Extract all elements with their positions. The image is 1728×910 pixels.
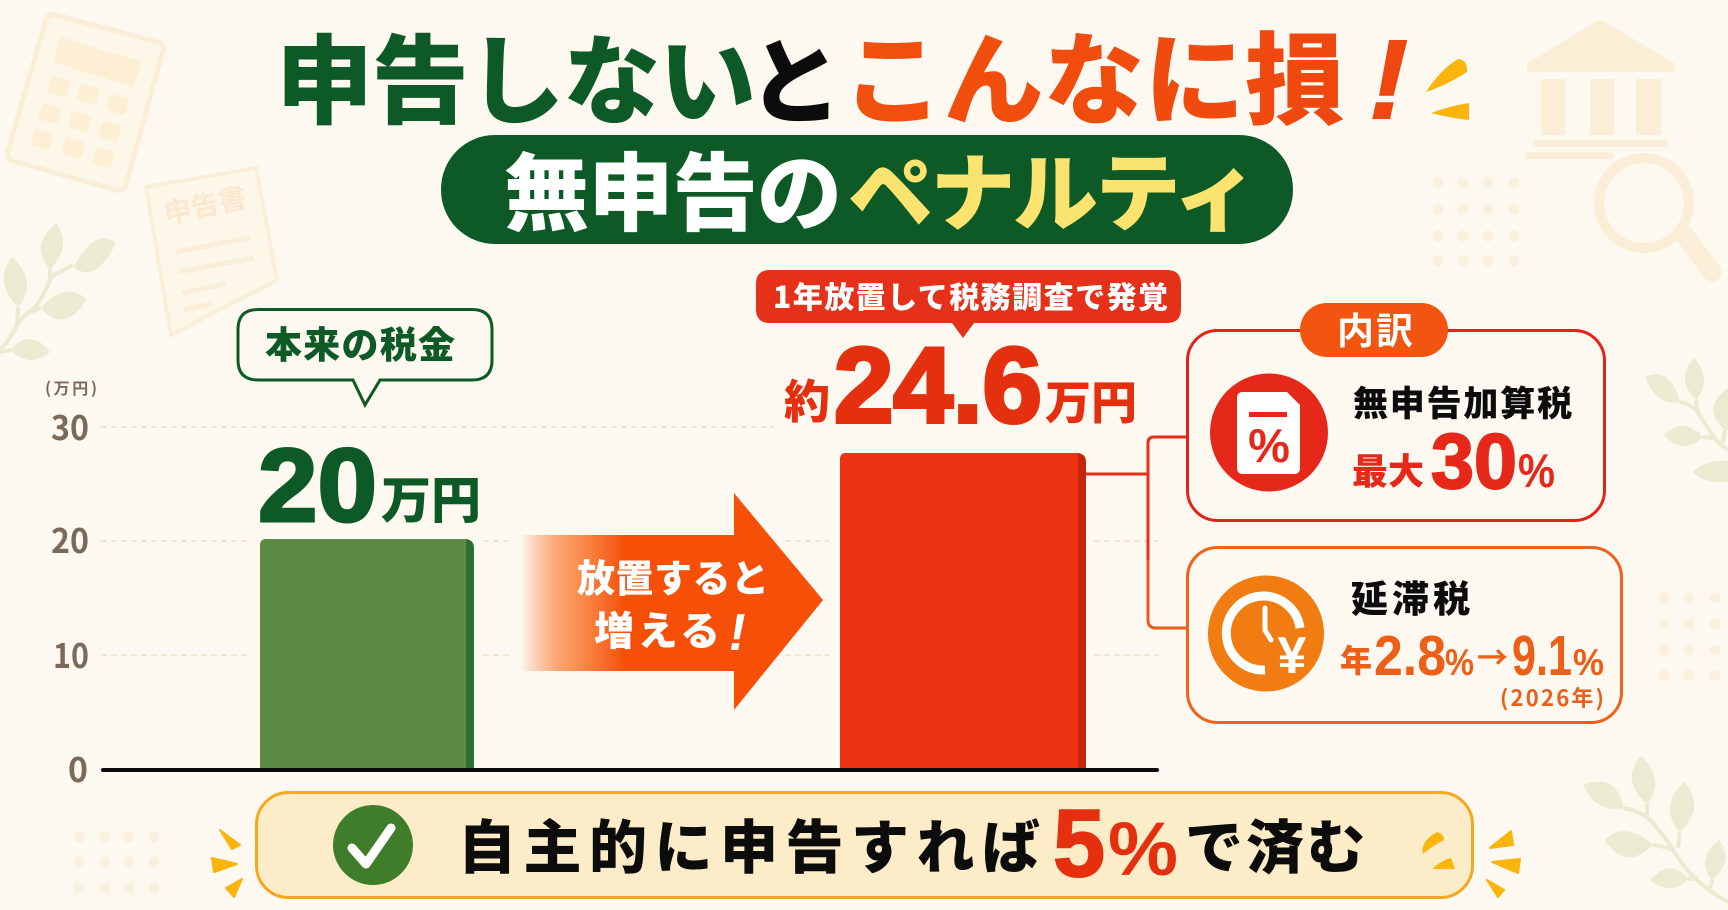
value: rate change: 2.8 [1374,624,1446,688]
title: orange part: ! [1358,16,1422,142]
panel: delinquent tax [1188,548,1622,722]
title: green and black part: と [748,8,842,144]
icon: faint leaf sprig right [1645,358,1728,482]
note: 2026: (2026年) [1500,681,1604,713]
sparks beside title [1426,59,1469,120]
value: 20万円 [258,428,481,544]
banner text: 5 [1053,790,1105,897]
panel: no-filing penalty [1188,301,1604,520]
value: rate change [1340,624,1604,688]
value: 約24.6万円: 約 [784,366,830,432]
callout: discovered by tax audit: 1年放置して税務調査で発覚 [773,273,1168,317]
callout: original tax [238,310,492,405]
decorative dots bottom left [74,832,160,894]
icon: faint tax return document: 申告書 [160,176,250,233]
icon: document with percent [1210,374,1328,492]
label: no-filing penalty name: 無申告加算税 [1353,376,1572,427]
y axis labels: 20 [51,514,89,563]
gridlines [101,427,1159,655]
value: 約24.6万円: 24.6 [834,325,1042,445]
arrow: grows if left: 増える [594,599,720,657]
title [276,0,1422,145]
decorative dots top right [1432,178,1520,266]
icon: faint tax return document [146,168,277,335]
banner text: % [1108,807,1178,892]
title: orange part: こんなに損 [843,0,1345,145]
y axis labels: 10 [53,629,89,678]
icon: faint calculator [8,15,163,190]
value: rate change: % [1445,642,1474,683]
subtitle pill [441,126,1293,249]
label: breakdown pill [1300,301,1448,357]
value: rate change: → [1477,633,1508,679]
icon: document with percent: % [1248,419,1290,472]
banner text [458,790,1365,897]
y axis labels: 30 [51,401,89,450]
value: rate change: % [1573,642,1604,683]
y axis unit: (万円) [45,375,97,399]
value: 20万円: 万円 [381,461,481,533]
title: green and black part: 申告しない [276,3,756,144]
value: rate change: 年 [1340,636,1372,682]
value: up to 30%: % [1518,444,1555,497]
y axis labels: 0 [68,743,88,792]
icon: clock with yen [1208,576,1324,692]
subtitle pill: 無申告の [504,126,842,249]
bar: after penalties [840,453,1086,770]
connector lines [1086,437,1187,628]
subtitle pill: ペナルティ [848,126,1258,249]
bar: original tax [260,539,474,770]
value: up to 30% [1352,417,1555,505]
value: rate change: 9.1 [1512,624,1572,688]
value: 約24.6万円 [784,325,1137,445]
value: up to 30%: 最大 [1352,443,1424,495]
callout: discovered by tax audit [756,270,1181,338]
sparks banner left [212,830,242,897]
icon: faint magnifier [1599,158,1712,272]
decorative dots right [1658,592,1720,680]
banner: voluntary filing [256,790,1472,898]
arrow: grows if left: ! [724,604,751,662]
sparks banner right [1487,831,1520,897]
label: breakdown pill: 内訳 [1337,301,1413,355]
sparks inside banner [1423,832,1455,869]
value: 20万円: 20 [258,428,377,544]
label: delinquent tax name: 延滞税 [1351,569,1470,623]
arrow: grows if left [521,493,823,710]
icon: faint bank [1525,19,1675,159]
value: 約24.6万円: 万円 [1045,367,1137,433]
icon: check mark [333,805,413,885]
icon: faint leaf sprig bottom right [1583,756,1728,902]
x axis baseline [101,768,1159,772]
arrow: grows if left: 放置すると [577,548,769,603]
value: up to 30%: 30 [1431,417,1517,505]
banner text: 自主的に申告すれば [458,801,1040,885]
icon: clock with yen: ¥ [1278,627,1307,685]
icon: faint leaf sprig left [0,223,116,360]
y axis labels [51,401,89,792]
banner text: で済む [1185,801,1365,885]
callout: original tax: 本来の税金 [265,315,455,369]
